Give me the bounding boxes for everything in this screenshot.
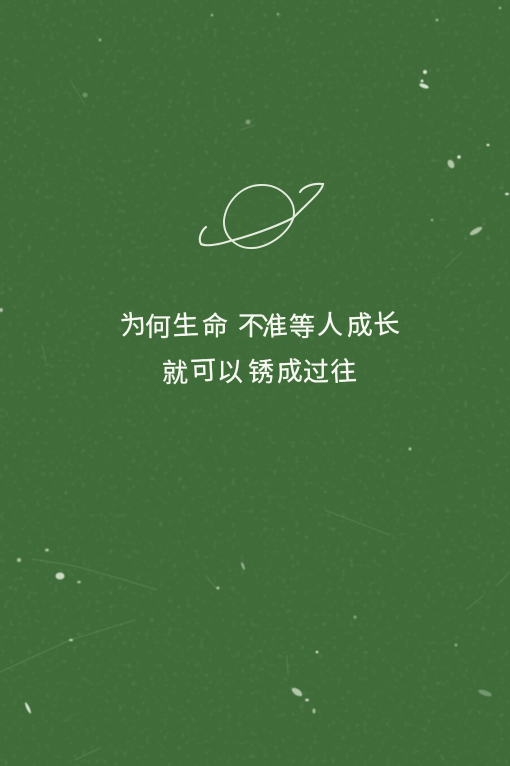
second line of quote: 锈 (248, 357, 274, 387)
second line of quote: 过 (303, 357, 329, 387)
first line of quote: 成 (346, 310, 373, 341)
first line of quote: 准 (260, 310, 288, 342)
first line of quote: 何 (145, 312, 171, 342)
first line of quote: 命 (202, 311, 228, 341)
first line of quote: 为 (118, 308, 148, 341)
quote text (118, 308, 400, 388)
icon: hand-drawn ringed planet (200, 184, 323, 248)
planet circle (224, 185, 294, 248)
second line of quote: 往 (330, 356, 357, 387)
second line of quote: 就 (162, 358, 188, 388)
first line of quote: 生 (172, 310, 199, 341)
first line of quote: 等 (289, 312, 315, 342)
second line of quote: 可 (190, 355, 217, 386)
second line of quote: 以 (217, 357, 243, 387)
planet ring (200, 184, 323, 245)
first line of quote: 长 (372, 308, 400, 340)
first line of quote: 人 (317, 310, 343, 340)
second line of quote: 成 (276, 356, 303, 387)
first line of quote: 不 (238, 311, 264, 341)
